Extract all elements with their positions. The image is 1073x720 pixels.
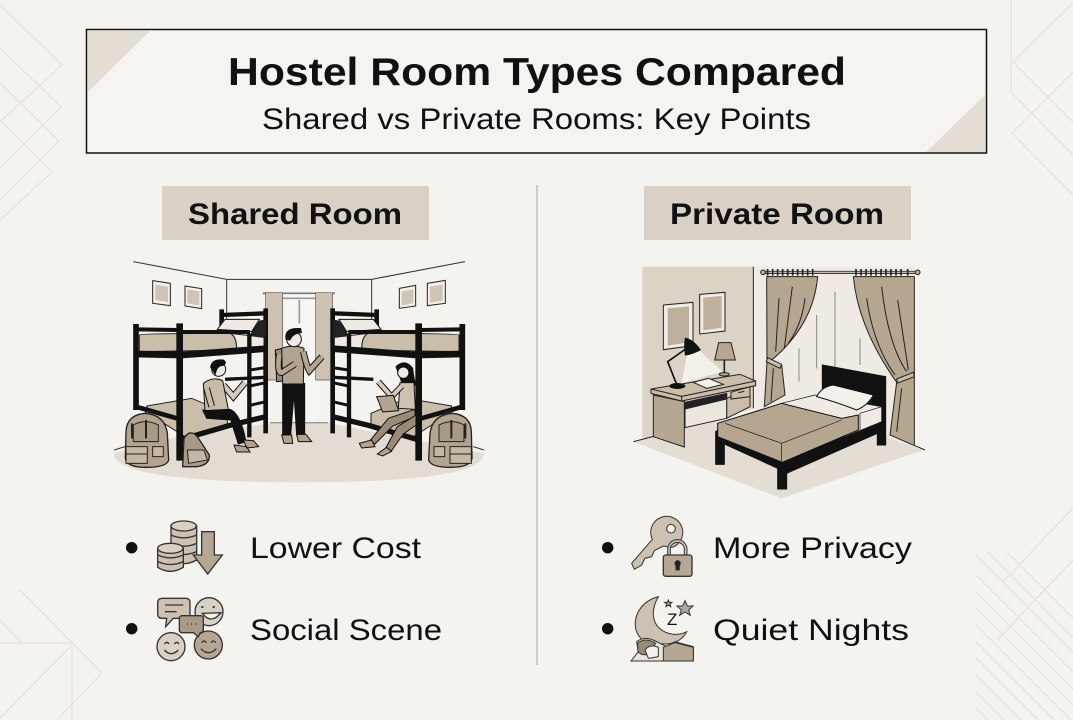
bullet: Quiet Nights [602, 623, 613, 634]
center divider [536, 185, 538, 665]
illustration: private room [633, 267, 925, 498]
window and curtains [263, 293, 335, 423]
right wall and window [754, 267, 915, 447]
bullet: Lower Cost [126, 542, 137, 553]
bunk bed: left [136, 308, 266, 461]
bullet: Social Scene [126, 623, 137, 634]
banner corner: top left [88, 31, 150, 92]
curtain: left [764, 277, 818, 407]
subtitle: Shared vs Private Rooms: Key Points [262, 103, 811, 136]
bunk bed: right [333, 308, 462, 461]
wall pictures [153, 280, 445, 309]
icon: moon and sleeper [631, 597, 693, 661]
heading: Private Room: Private Room [670, 198, 884, 231]
illustration: shared dorm room [114, 262, 484, 482]
desk lamp [668, 338, 701, 389]
walls and ceiling lines [114, 262, 484, 450]
desk [651, 374, 756, 447]
heading: Shared Room [162, 186, 429, 240]
curtain rod [761, 269, 920, 276]
wall pictures [663, 292, 725, 350]
moon z letter: Z [667, 610, 677, 629]
title banner [86, 30, 986, 153]
wall edges and baseboard [633, 267, 925, 450]
icon: coins and down arrow [158, 521, 222, 574]
bed [716, 365, 886, 489]
icon: key and padlock [632, 516, 692, 576]
icon: social chat bubbles and faces [157, 598, 223, 661]
label: Social Scene: Social Scene [250, 614, 442, 647]
backpack: right large [429, 411, 472, 467]
heading: Shared Room: Shared Room [188, 198, 402, 231]
person sitting on left bunk [203, 360, 259, 452]
window glass lines [799, 292, 860, 382]
curtain: right [853, 277, 914, 446]
floor [633, 412, 923, 498]
label: More Privacy: More Privacy [713, 532, 912, 565]
label: Quiet Nights: Quiet Nights [713, 614, 909, 647]
floor [114, 423, 484, 482]
person standing in the center [275, 329, 322, 443]
desk lamp light [682, 350, 722, 383]
label: Lower Cost: Lower Cost [250, 532, 422, 565]
left wall [642, 267, 753, 438]
person sitting on right bunk [359, 363, 417, 456]
backpack: left large [125, 411, 169, 467]
backpack: left small [183, 433, 209, 467]
heading: Private Room [644, 186, 911, 240]
table lamp [715, 343, 735, 376]
bullet: More Privacy [602, 542, 613, 553]
banner corner: bottom right [926, 95, 985, 152]
main title: Hostel Room Types Compared [228, 51, 846, 94]
